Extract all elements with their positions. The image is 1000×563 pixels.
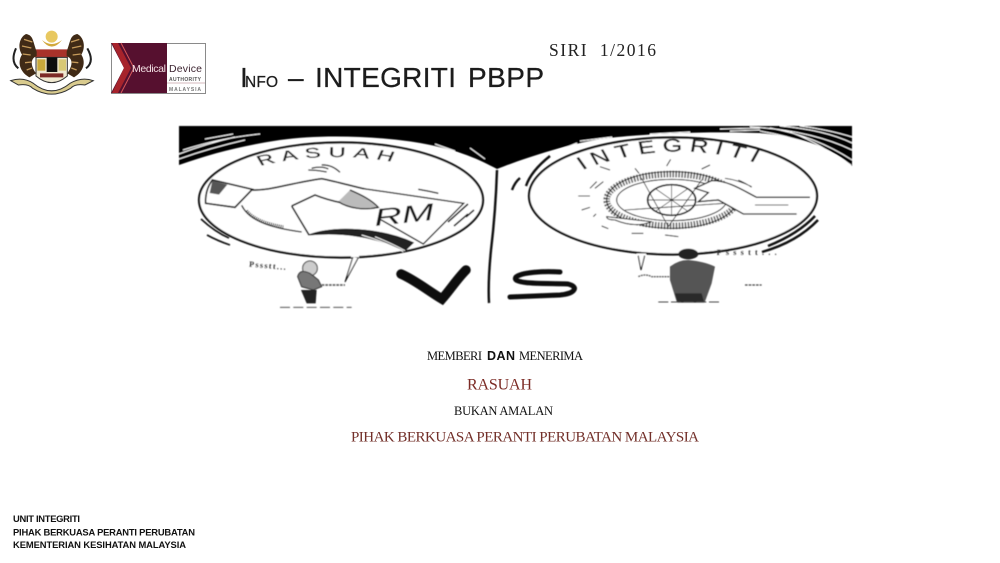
line: agency name: PIHAK BERKUASA PERANTI PERUBATAN MALAYSIA (351, 430, 699, 446)
cartoon: rasuah vs integriti (178, 125, 853, 309)
bubble tail (345, 257, 358, 282)
letter V (401, 270, 466, 299)
message block (351, 349, 699, 446)
icon: handshake and money (206, 165, 464, 253)
line: memberi dan menerima: MEMBERI (427, 349, 482, 363)
logo: Medical Device Authority Malaysia (111, 43, 206, 94)
panel: integriti bubble (510, 136, 820, 304)
line: memberi dan menerima: MENERIMA (519, 349, 583, 363)
letter S (510, 272, 574, 297)
title: NFO (245, 74, 278, 91)
line: rasuah: RASUAH (467, 376, 532, 394)
footer: unit details: KEMENTERIAN KESIHATAN MALAYSIA (13, 539, 186, 550)
line: memberi dan menerima (427, 349, 583, 363)
logo: Medical Device Authority Malaysia: Device (169, 63, 202, 75)
icon: hand holding emblem (578, 159, 810, 237)
speed marks (201, 204, 474, 245)
title: PBPP (468, 62, 544, 93)
heading: RASUAH: RASUAH (256, 146, 395, 166)
footer: unit details: UNIT INTEGRITI (13, 513, 80, 524)
divider line (489, 170, 497, 303)
logo: Malaysian coat of arms (11, 31, 93, 94)
black sky band (179, 126, 852, 169)
figure: small man with whisper: Pssstt... (249, 260, 286, 272)
panel: rasuah bubble (197, 140, 485, 309)
footer: unit details (13, 513, 195, 550)
title (240, 62, 544, 93)
line: memberi dan menerima: DAN (487, 349, 515, 363)
logo: Medical Device Authority Malaysia: AUTHORITY (169, 77, 202, 83)
title: INTEGRITI (315, 62, 456, 93)
line: bukan amalan: BUKAN AMALAN (454, 404, 553, 418)
figure: man in suit with whisper (638, 248, 777, 303)
heading: INTEGRITI: INTEGRITI (576, 138, 760, 170)
label: RM note: RM (373, 199, 435, 232)
title: – (288, 62, 304, 93)
speed marks (512, 156, 818, 252)
series label: SIRI 1/2016 (549, 40, 656, 60)
hatching (179, 126, 852, 168)
bubble tail (638, 254, 645, 270)
footer: unit details: PIHAK BERKUASA PERANTI PERUBATAN (13, 526, 195, 538)
logo: Medical Device Authority Malaysia: Medical (132, 63, 166, 75)
figure: man in suit with whisper: Pssstt... (717, 248, 777, 257)
figure: small man with whisper (249, 260, 352, 307)
title: I (240, 62, 248, 93)
logo: Medical Device Authority Malaysia: MALAYSIA (169, 87, 201, 93)
